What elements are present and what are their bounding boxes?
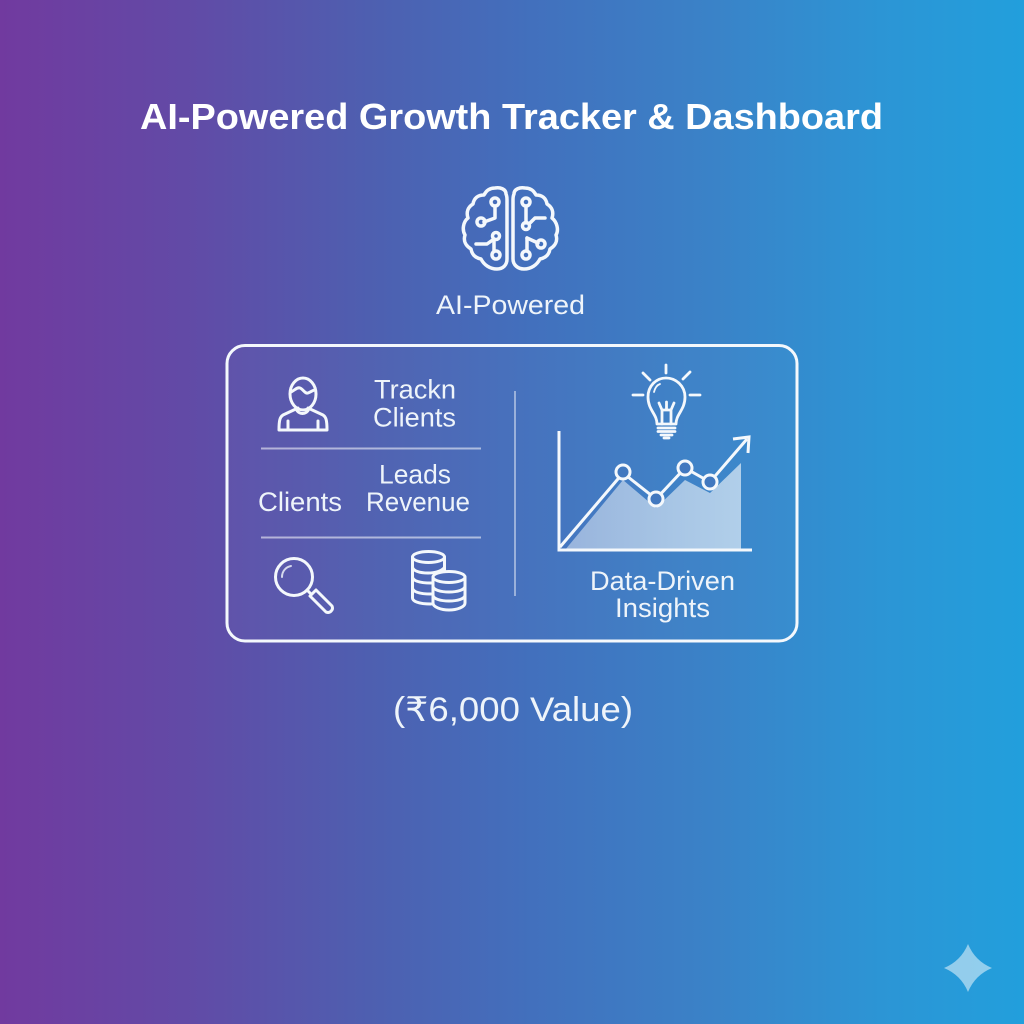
chart: growth line — [559, 431, 752, 550]
panel frame — [227, 346, 797, 641]
label: AI-Powered: AI-Powered — [436, 290, 585, 320]
text: Leads Revenue: Revenue — [366, 487, 470, 517]
text: Trackn Clients: Clients — [373, 402, 456, 432]
chart area — [565, 463, 741, 550]
divider — [261, 536, 481, 538]
vertical divider — [514, 391, 516, 596]
icon: sparkle — [944, 944, 992, 992]
text: Data-Driven Insights: Data-Driven — [590, 566, 735, 596]
text: Leads Revenue: Leads — [379, 460, 451, 490]
text: Data-Driven Insights — [590, 566, 735, 623]
panel: dashboard — [227, 346, 797, 641]
text: Clients: Clients — [258, 487, 342, 517]
icon: client — [279, 378, 327, 430]
icon: AI brain — [463, 188, 557, 269]
value label: (₹6,000 Value) — [393, 691, 633, 729]
icon: coin stacks — [412, 552, 465, 610]
text: Leads Revenue — [366, 460, 470, 517]
chart axes — [559, 431, 752, 550]
text: Trackn Clients — [373, 374, 456, 432]
chart data points — [616, 461, 717, 506]
title: AI-Powered Growth Tracker & Dashboard — [140, 96, 883, 137]
chart line — [560, 439, 747, 547]
icon: magnifier — [276, 558, 332, 612]
text: Trackn Clients: Trackn — [374, 374, 456, 404]
chart arrowhead — [733, 437, 749, 453]
icon: light bulb — [633, 365, 700, 438]
divider — [261, 448, 481, 450]
text: Data-Driven Insights: Insights — [615, 593, 710, 623]
